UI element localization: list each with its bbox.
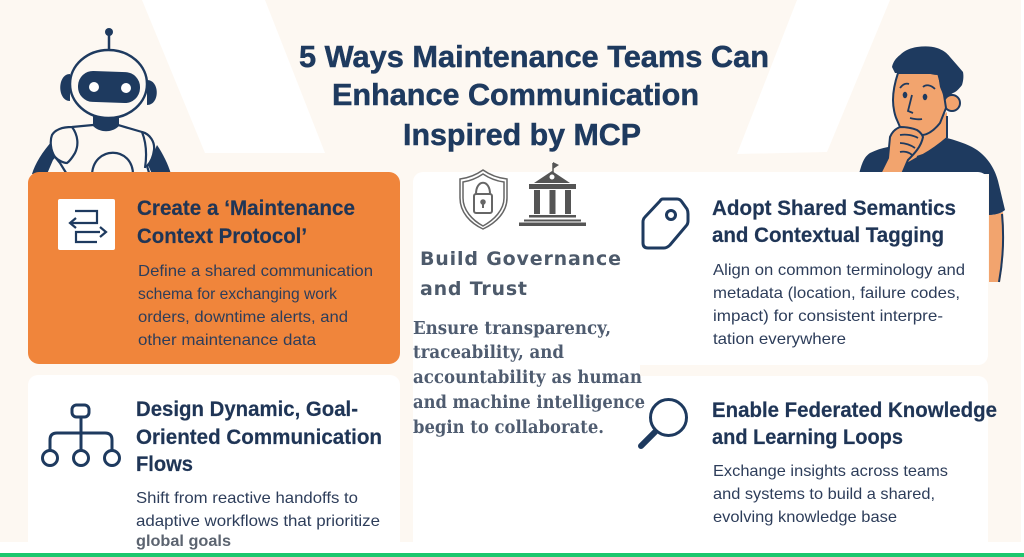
panel: enable federated knowledge: Enable Federated Knowledge: [712, 399, 997, 422]
panel: create a maintenance context protocol: Define a shared communication: [138, 263, 373, 280]
panel: build governance and trust: accountability as human: [413, 368, 642, 388]
panel: build governance and trust: [413, 162, 645, 553]
panel: design dynamic flows: [0, 375, 400, 553]
panel: create a maintenance context protocol: schema for exchanging work: [138, 286, 338, 303]
panel: adopt shared semantics: and Contextual Tagging: [712, 224, 944, 247]
panel: design dynamic flows: Design Dynamic, Goal-: [136, 398, 358, 421]
title: Inspired by MCP: [403, 117, 641, 152]
panel: enable federated knowledge: [640, 376, 997, 553]
panel: build governance and trust: and Trust: [420, 278, 527, 300]
panel: build governance and trust: Ensure transparency,: [413, 319, 611, 339]
title: [299, 39, 769, 152]
panel: create a maintenance context protocol: [28, 172, 400, 364]
icon: hierarchy: [42, 405, 120, 466]
panel: design dynamic flows: adaptive workflows that prioritize: [136, 513, 380, 530]
illustration: thinking man: [859, 46, 1005, 282]
panel: adopt shared semantics: [640, 172, 988, 365]
panel: create a maintenance context protocol: Create a ‘Maintenance: [137, 197, 355, 220]
panel: create a maintenance context protocol: orders, downtime alerts, and: [138, 309, 348, 326]
panel: design dynamic flows: Flows: [136, 453, 193, 476]
icon: tag: [643, 199, 688, 248]
panel: enable federated knowledge: and systems to build a shared,: [713, 486, 935, 503]
title: 5 Ways Maintenance Teams Can: [299, 39, 769, 74]
panel: design dynamic flows: Oriented Communication: [136, 426, 382, 449]
panel: enable federated knowledge: and Learning Loops: [712, 426, 903, 449]
panel: create a maintenance context protocol: Context Protocol’: [137, 225, 307, 248]
panel: adopt shared semantics: Align on common terminology and: [713, 262, 965, 279]
panel: adopt shared semantics: Adopt Shared Semantics: [712, 197, 956, 220]
panel: adopt shared semantics: metadata (location, failure codes,: [713, 285, 960, 302]
panel: adopt shared semantics: impact) for consistent interpre-: [713, 308, 943, 325]
panel: enable federated knowledge: Exchange insights across teams: [713, 463, 948, 480]
panel: enable federated knowledge: evolving knowledge base: [713, 509, 897, 526]
icon: shield with lock: [460, 170, 507, 229]
panel: create a maintenance context protocol: other maintenance data: [138, 332, 316, 349]
icon: institution building: [519, 162, 586, 226]
panel: design dynamic flows: Shift from reactive handoffs to: [136, 490, 358, 507]
panel: design dynamic flows: global goals: [136, 533, 231, 550]
panel: adopt shared semantics: tation everywhere: [713, 331, 846, 348]
panel: build governance and trust: begin to collaborate.: [413, 418, 604, 438]
panel: build governance and trust: traceability, and: [413, 343, 564, 363]
illustration: robot: [32, 28, 171, 176]
panel: build governance and trust: and machine intelligence: [413, 393, 645, 413]
icon: exchange arrows: [58, 199, 115, 250]
title: Enhance Communication: [332, 77, 699, 112]
panel: build governance and trust: Build Governance: [420, 248, 621, 270]
icon: magnifier: [641, 400, 686, 446]
